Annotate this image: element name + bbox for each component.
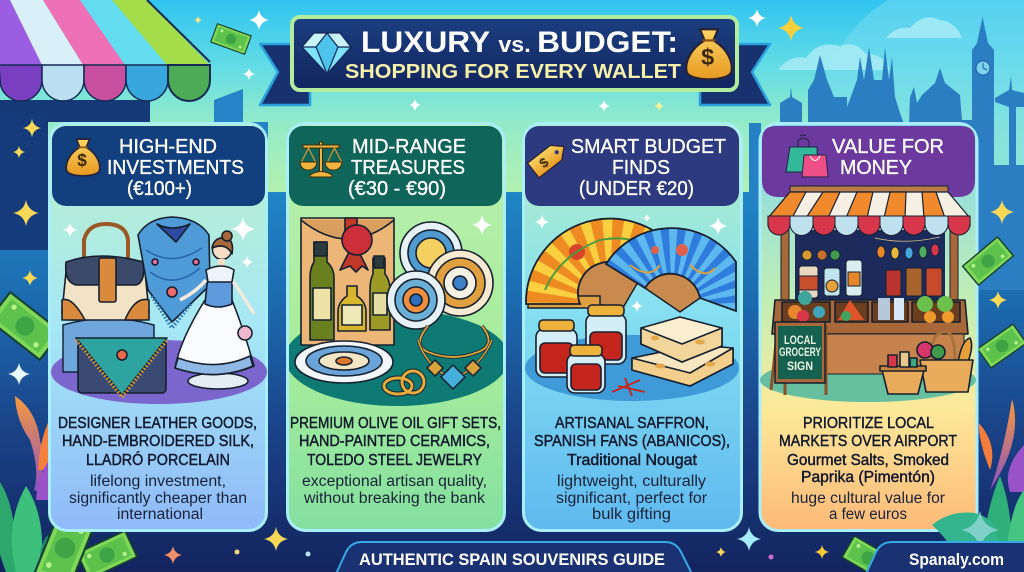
- stall posts: [781, 230, 958, 330]
- right banknote lower: [978, 324, 1024, 368]
- icon: money bag: $: [77, 150, 87, 170]
- panel: value for money: [760, 124, 977, 530]
- clutch and shawl: [76, 338, 167, 397]
- panel: smart budget finds: [524, 124, 742, 530]
- orange fan: [525, 218, 653, 309]
- description text: [791, 490, 945, 523]
- illustration: luxury goods: [51, 217, 267, 404]
- heading: [571, 135, 726, 200]
- right banknote upper: [963, 237, 1013, 285]
- right foliage: [932, 399, 1024, 572]
- product text: Traditional Nougat: [567, 452, 698, 469]
- chalkboard sign: LOCAL: [784, 335, 816, 347]
- sparkles: [63, 217, 255, 268]
- heading: INVESTMENTS: [107, 156, 244, 179]
- illustration: artisan goods: [285, 218, 509, 406]
- pale circle in the sky: [820, 0, 1024, 260]
- upper left dark block: [0, 100, 150, 122]
- sparkles: [535, 214, 727, 312]
- chalkboard sign: GROCERY: [779, 347, 821, 359]
- blue fan: [604, 227, 737, 313]
- panel header: [289, 126, 502, 206]
- market awning top left: [0, 0, 209, 64]
- heading: VALUE FOR: [832, 135, 944, 158]
- panel: mid-range treasures: [285, 124, 509, 530]
- bottom right banknote: [842, 536, 894, 572]
- description text: international: [117, 506, 203, 523]
- porcelain figurine: [175, 231, 254, 389]
- nougat blocks: [632, 317, 733, 386]
- heading: FINDS: [612, 156, 670, 179]
- icon: price tag: $: [536, 154, 552, 171]
- heading: MONEY: [840, 156, 912, 179]
- description text: [556, 473, 707, 523]
- product text: SPANISH FANS (ABANICOS),: [534, 433, 730, 450]
- title line two: SHOPPING FOR EVERY WALLET: [345, 61, 681, 83]
- ring gold layer: [384, 371, 424, 394]
- lower background: [0, 192, 1024, 572]
- teal display base: [285, 310, 509, 406]
- icon: balance scale: [300, 142, 342, 177]
- building band at panel gap: [749, 123, 761, 203]
- produce crates: [772, 291, 968, 334]
- description text: huge cultural value for: [791, 490, 945, 507]
- illustration: market stall: [760, 186, 976, 402]
- top rail: [790, 186, 948, 192]
- icon: money bag: [66, 139, 100, 176]
- panel header: [762, 126, 975, 197]
- product text: PREMIUM OLIVE OIL GIFT SETS,: [290, 415, 501, 432]
- description text: a few euros: [829, 506, 907, 523]
- footer tab: guide title: [336, 542, 692, 572]
- title banner: [260, 17, 770, 105]
- product text: PRIORITIZE LOCAL: [803, 415, 934, 432]
- left banknote: [0, 292, 61, 360]
- ceramic plates: [295, 222, 493, 383]
- panel: high-end investments: [50, 124, 267, 530]
- right ribbon: [700, 44, 770, 105]
- left column: [0, 118, 48, 250]
- product text: TOLEDO STEEL JEWELRY: [307, 452, 482, 469]
- saffron threads: [612, 378, 645, 396]
- description text: [69, 473, 247, 523]
- heading: [107, 135, 244, 200]
- icon: money bag: $: [701, 44, 714, 70]
- bottom left banknotes: [34, 509, 137, 572]
- heading: [832, 135, 944, 179]
- title line one: LUXURY vs. BUDGET:: [361, 26, 678, 59]
- hanging goods: [802, 237, 940, 260]
- icon: money bag: [686, 29, 732, 79]
- flying banknote top: [211, 24, 251, 54]
- description text: without breaking the bank: [303, 490, 485, 507]
- blue display base: [525, 335, 739, 401]
- product text: [290, 415, 501, 469]
- heading: MID-RANGE: [352, 135, 466, 158]
- panel body: [288, 124, 504, 530]
- silk scarf: [138, 217, 210, 322]
- description text: exceptional artisan quality,: [302, 473, 487, 490]
- heading: (€100+): [127, 177, 192, 200]
- clock face on tower: [976, 61, 990, 75]
- description text: lightweight, culturally: [557, 473, 706, 490]
- heading: (UNDER €20): [579, 177, 694, 200]
- background sky: [0, 0, 1024, 200]
- ground: [760, 358, 976, 402]
- gold rings: [384, 371, 424, 394]
- panel body: [524, 124, 742, 530]
- jars on shelf: [799, 260, 942, 298]
- product text: [58, 415, 257, 469]
- panel header: [525, 126, 739, 206]
- product text: Gourmet Salts, Smoked: [787, 452, 949, 469]
- left foliage: [0, 396, 48, 572]
- heading: [348, 135, 466, 200]
- handbag: [62, 224, 149, 320]
- heading: TREASURES: [351, 156, 465, 179]
- clouds: [778, 17, 962, 70]
- toledo necklace: [418, 326, 492, 389]
- product text: HAND-PAINTED CERAMICS,: [299, 433, 490, 450]
- product text: [779, 415, 957, 486]
- product text: Paprika (Pimentón): [801, 469, 935, 486]
- product text: MARKETS OVER AIRPORT: [779, 433, 957, 450]
- city skyline silhouette: [780, 17, 1024, 290]
- heading: HIGH-END: [119, 135, 217, 158]
- banner plate: [292, 17, 737, 90]
- purple display base: [51, 340, 267, 404]
- wicker baskets: [880, 332, 973, 394]
- icon: diamond: [302, 33, 351, 74]
- icon: shopping bags: [786, 135, 828, 177]
- product text: [534, 415, 730, 469]
- panel body: [50, 124, 266, 530]
- fringe: [152, 296, 192, 328]
- heading: (€30 - €90): [348, 177, 446, 200]
- awning edge: [147, 0, 210, 62]
- description text: bulk gifting: [592, 506, 671, 523]
- gift box: [301, 218, 394, 345]
- panel body: [760, 124, 977, 530]
- sparkles: [472, 215, 492, 235]
- striped awning: [768, 192, 970, 226]
- product text: LLADRÓ PORCELAIN: [86, 450, 230, 469]
- chalkboard sign: [771, 322, 826, 395]
- description text: significant, perfect for: [556, 490, 707, 507]
- stall counter: [778, 334, 964, 374]
- product text: ARTISANAL SAFFRON,: [555, 415, 709, 432]
- small left buildings: [214, 89, 268, 200]
- awning scallops: [768, 216, 970, 236]
- chalkboard sign: SIGN: [787, 361, 813, 373]
- left ribbon: [260, 44, 310, 105]
- description text: significantly cheaper than: [69, 490, 247, 507]
- illustration: fans saffron nougat: [525, 219, 739, 401]
- heading: SMART BUDGET: [571, 135, 726, 158]
- awning scallops: [0, 65, 210, 101]
- icon: price tag: [528, 139, 570, 178]
- pedestal: [63, 318, 154, 372]
- footer tab: website: [866, 542, 1024, 572]
- product text: HAND-EMBROIDERED SILK,: [62, 433, 254, 450]
- product text: DESIGNER LEATHER GOODS,: [58, 415, 257, 432]
- panel header: [52, 126, 265, 206]
- saffron jars: [536, 305, 626, 393]
- olive oil bottles: [310, 242, 390, 340]
- stall interior: [795, 230, 945, 300]
- footer tab: website: Spanaly.com: [909, 550, 1004, 569]
- footer tab: guide title: AUTHENTIC SPAIN SOUVENIRS GUIDE: [359, 550, 665, 569]
- description text: lifelong investment,: [90, 473, 226, 490]
- description text: [302, 473, 487, 507]
